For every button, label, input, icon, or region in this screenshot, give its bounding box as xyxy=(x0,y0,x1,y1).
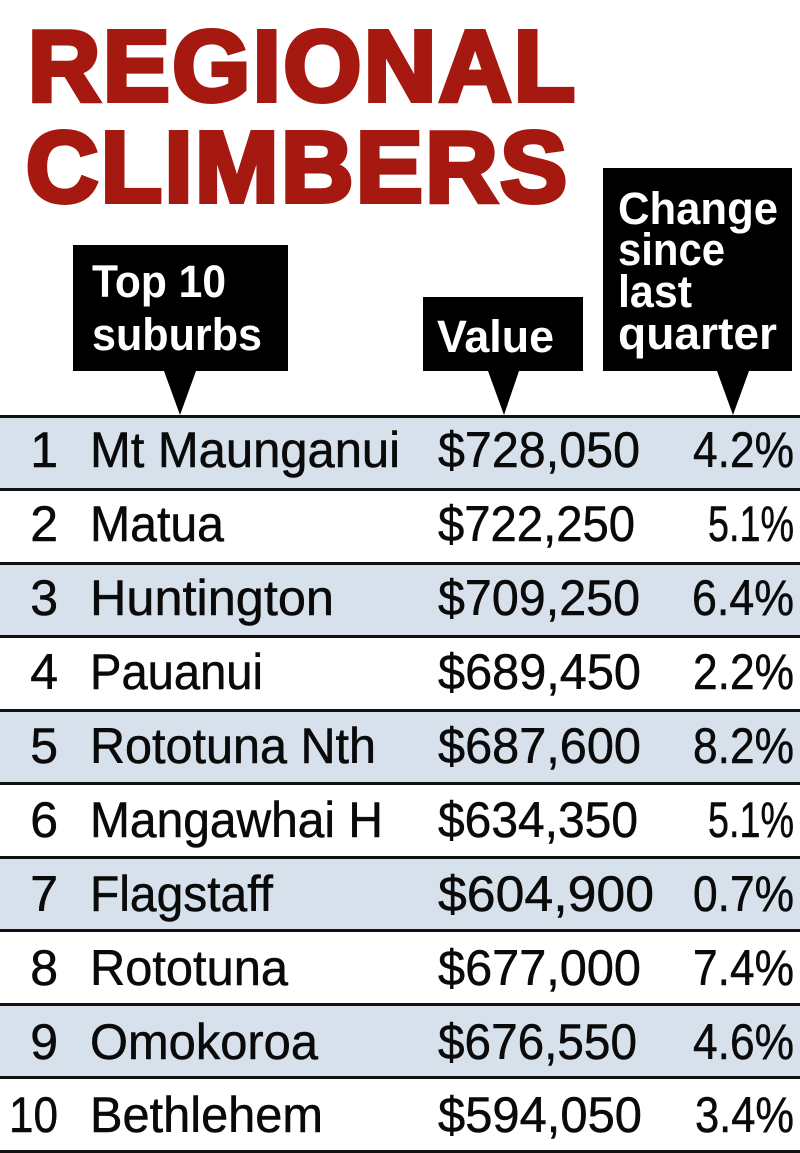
row 9: 9 xyxy=(30,1014,58,1070)
row 1 xyxy=(0,416,800,490)
row 5 xyxy=(0,710,800,784)
row 7: 7 xyxy=(30,866,58,922)
row 4: 4 xyxy=(30,644,58,700)
row 9 xyxy=(0,1004,800,1078)
row 8: $677,000 xyxy=(438,940,641,996)
row 6: $634,350 xyxy=(438,792,638,848)
column header: top 10 suburbs: suburbs xyxy=(92,309,262,360)
row 1: 1 xyxy=(30,422,58,478)
row 3: $709,250 xyxy=(438,570,640,626)
row 5: 5 xyxy=(30,718,58,774)
column header: change since last quarter: quarter xyxy=(618,308,777,359)
row 1: Mt Maunganui xyxy=(90,422,400,478)
row 10: Bethlehem xyxy=(90,1087,323,1143)
row 2: 2 xyxy=(30,496,58,552)
column header: change since last quarter: last xyxy=(618,266,692,317)
row 8 xyxy=(30,940,794,996)
row 1: $728,050 xyxy=(438,422,640,478)
row 6 xyxy=(30,792,794,848)
row 4 xyxy=(30,644,794,700)
table of top 10 suburbs xyxy=(0,415,800,1153)
title: REGIONAL xyxy=(28,10,575,122)
row 6: Mangawhai H xyxy=(90,792,383,848)
row 7: $604,900 xyxy=(438,866,654,922)
row 3 xyxy=(0,563,800,637)
column header: value: Value xyxy=(437,311,554,362)
row 2: Matua xyxy=(90,496,224,552)
column header: change since last quarter: since xyxy=(618,224,725,275)
column header: top 10 suburbs: Top 10 xyxy=(92,256,226,307)
column header: top 10 suburbs xyxy=(73,245,288,415)
row 3: Huntington xyxy=(90,570,334,626)
row 3: 3 xyxy=(30,570,58,626)
column header: change since last quarter: Change xyxy=(618,183,778,234)
row 7 xyxy=(0,857,800,931)
title xyxy=(26,10,575,224)
row 5: Rototuna Nth xyxy=(90,718,376,774)
row 10: 10 xyxy=(9,1087,58,1143)
row 10 xyxy=(9,1087,794,1143)
row 9: $676,550 xyxy=(438,1014,637,1070)
row 4: $689,450 xyxy=(438,644,641,700)
row 7: Flagstaff xyxy=(90,866,273,922)
title: CLIMBERS xyxy=(26,112,567,224)
row 8: 8 xyxy=(30,940,58,996)
row 9: Omokoroa xyxy=(90,1014,318,1070)
row 5: $687,600 xyxy=(438,718,641,774)
row 10: $594,050 xyxy=(438,1087,642,1143)
row 4: Pauanui xyxy=(90,644,263,700)
row 6: 6 xyxy=(30,792,58,848)
column header: value xyxy=(423,297,583,415)
column header: change since last quarter xyxy=(603,168,792,415)
row 2: $722,250 xyxy=(438,496,635,552)
row 8: Rototuna xyxy=(90,940,288,996)
row 2 xyxy=(30,496,794,552)
